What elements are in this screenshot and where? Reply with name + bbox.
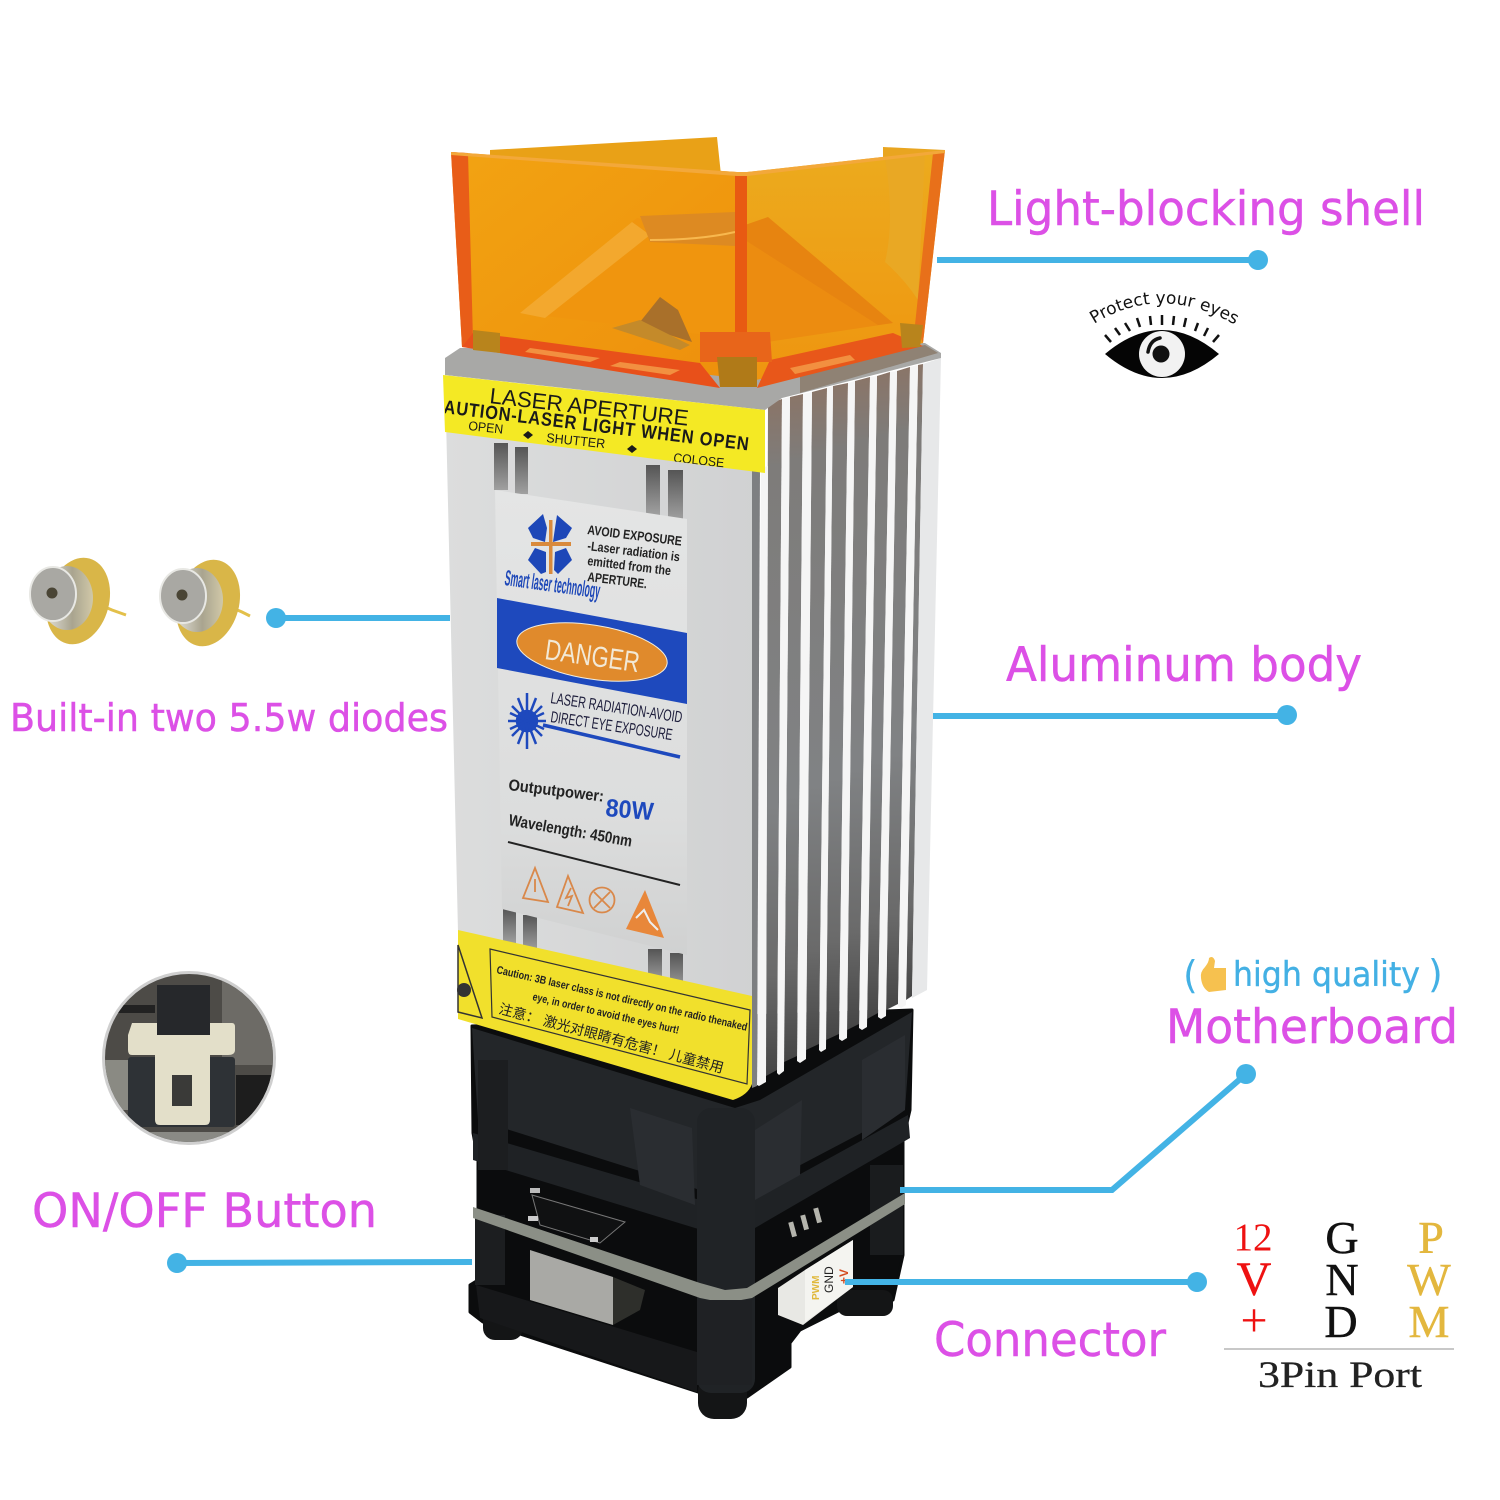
12V+ column: V [1237,1253,1272,1306]
label: Aluminum body [1006,638,1362,693]
high quality note: high quality [1233,955,1420,995]
circuit board edge [473,1193,905,1303]
white 3-pin connector: +V [837,1269,851,1284]
danger band: DANGER [543,634,642,679]
GND column: D [1324,1296,1358,1347]
laser starburst icon [508,693,546,749]
leader line [937,250,1268,270]
orange light-blocking shell [451,137,945,388]
GND column: G [1325,1212,1359,1263]
leader line [266,608,450,628]
3-pin port legend [1224,1212,1454,1396]
white 3-pin connector [778,1240,853,1325]
laser radiation text [549,690,683,744]
GND column [1324,1212,1359,1347]
callout: motherboard [900,952,1458,1190]
top yellow warning tape: LASER APERTURE [488,383,690,431]
warning icons [523,868,664,938]
laser radiation text: DIRECT EYE EXPOSURE [549,709,674,744]
base rim [462,333,923,388]
pin solder joints [788,1207,822,1237]
heat sink fins [752,358,941,1088]
wavelength text: Wavelength: 450nm [507,812,633,851]
avoid exposure text: AVOID EXPOSURE [587,522,683,549]
brand logo [528,514,572,574]
callout: light-blocking shell [937,182,1425,270]
label: ON/OFF Button [32,1184,377,1239]
laser module product [442,137,945,1419]
icon: protect your eyes: Protect your eyes [1089,292,1238,324]
callout: diodes [10,550,450,740]
inner pyramid [520,212,893,350]
PWM column: P [1418,1212,1444,1263]
top yellow warning tape: AUTION-LASER LIGHT WHEN OPEN [442,397,751,455]
label: Built-in two 5.5w diodes [10,696,448,740]
high quality note [1183,952,1443,997]
bottom yellow caution tape: 注意： 激光对眼睛有危害！ 儿童禁用 [497,1000,725,1076]
PWM column: W [1407,1254,1451,1305]
icon: protect your eyes [1089,292,1238,378]
output power text: Outputpower: [508,777,605,806]
power switch on board [528,1188,625,1243]
diode left [30,550,126,652]
laser warning plate [495,490,687,955]
cooling fan and base [470,1010,912,1419]
PWM column: M [1409,1296,1449,1347]
12V+ column: 12 [1234,1216,1272,1259]
avoid exposure text: emitted from the [587,553,672,578]
danger band [497,598,687,704]
high quality note: ( [1183,953,1198,997]
port caption: 3Pin Port [1258,1355,1423,1396]
PWM column [1407,1212,1451,1347]
shell edges [451,152,473,347]
vent slots [494,443,683,990]
laser radiation text: LASER RADIATION-AVOID [549,690,683,727]
callout: on/off button [32,970,472,1273]
icon: thumbs up [1201,957,1226,992]
leader line [167,1253,472,1273]
white 3-pin connector: GND [822,1266,836,1293]
top yellow warning tape: SHUTTER [546,430,606,451]
label: Light-blocking shell [987,182,1425,237]
leader line [933,705,1297,725]
body top face [445,343,941,410]
top yellow warning tape: OPEN [468,418,504,437]
bottom yellow caution tape [457,930,752,1100]
avoid exposure text: APERTURE. [587,569,648,591]
80W value: 80W [604,794,655,826]
bottom yellow caution tape: eye, in order to avoid the eyes hurt! [531,991,680,1037]
12V+ column: + [1240,1294,1268,1347]
silver port [530,1250,613,1325]
label: Connector [934,1313,1167,1368]
avoid exposure text: -Laser radiation is [587,538,681,564]
white 3-pin connector: PWM [811,1276,822,1300]
high quality note: ) [1428,952,1443,996]
avoid exposure text [587,522,683,591]
GND column: N [1325,1254,1359,1305]
top yellow warning tape [442,375,765,473]
callout: aluminum body [933,638,1362,725]
laser warning plate: Smart laser technology [503,565,602,603]
top yellow warning tape: COLOSE [673,450,725,470]
callout: connector [845,1272,1207,1368]
rubber feet [483,1290,893,1419]
leader line [845,1272,1207,1292]
leader line [900,1064,1256,1190]
button photo [100,970,282,1150]
bottom yellow caution tape: Caution: 3B laser class is not directly on the radio thenaked [495,964,748,1034]
body front face [445,375,765,1000]
label: Motherboard [1166,1000,1458,1055]
diode right [160,552,250,654]
12V+ column [1234,1216,1272,1347]
